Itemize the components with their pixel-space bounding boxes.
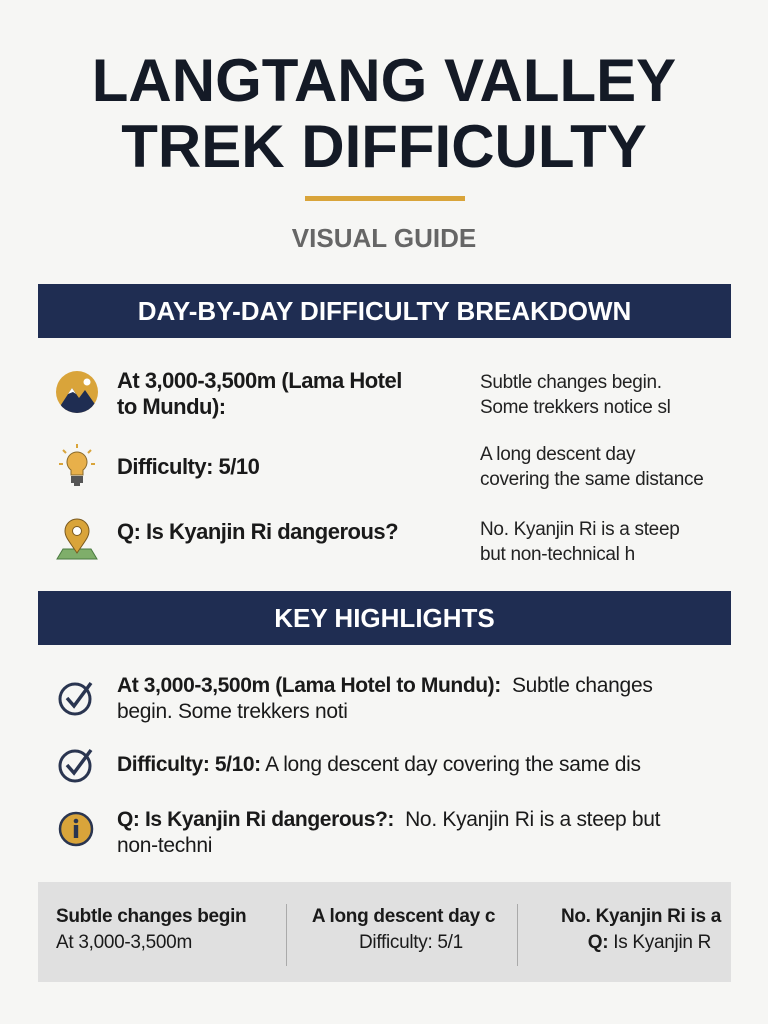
row 3 xyxy=(56,518,680,565)
title xyxy=(92,47,676,180)
highlight 1: begin. Some trekkers noti xyxy=(117,700,348,723)
banner: key highlights xyxy=(38,591,731,645)
icon: check xyxy=(58,749,92,782)
row 1 xyxy=(56,368,671,419)
icon: map pin xyxy=(56,518,98,560)
summary cell 3: No. Kyanjin Ri is a xyxy=(561,906,721,927)
label xyxy=(117,368,402,419)
highlight 2 xyxy=(58,749,641,782)
summary cell 2: A long descent day c xyxy=(312,906,495,927)
description xyxy=(480,519,680,565)
highlight 1 xyxy=(58,674,653,723)
icon: mountain xyxy=(56,371,98,413)
subtitle: VISUAL GUIDE xyxy=(292,223,476,253)
summary cell 3 xyxy=(561,906,722,953)
title: LANGTANG VALLEY xyxy=(92,47,676,114)
row 2 xyxy=(59,444,704,490)
label: At 3,000-3,500m (Lama Hotel xyxy=(117,368,402,393)
summary cell 1: At 3,000-3,500m xyxy=(56,932,192,953)
description xyxy=(480,444,704,490)
highlight 1: At 3,000-3,500m (Lama Hotel to Mundu): Subtle changes xyxy=(117,674,653,697)
highlight 2: Difficulty: 5/10: A long descent day covering the same dis xyxy=(117,753,641,776)
description: Some trekkers notice sl xyxy=(480,397,671,418)
description: Subtle changes begin. xyxy=(480,372,662,393)
label: Difficulty: 5/10 xyxy=(117,454,259,479)
summary cell 2 xyxy=(312,906,495,953)
description: No. Kyanjin Ri is a steep xyxy=(480,519,680,540)
icon: info xyxy=(58,812,94,846)
label: Q: Is Kyanjin Ri dangerous? xyxy=(117,519,398,544)
description: covering the same distance xyxy=(480,469,704,490)
summary cell 3: Q: Is Kyanjin R xyxy=(588,932,711,953)
description: but non-technical h xyxy=(480,544,635,565)
gold underline xyxy=(305,196,465,201)
banner: key highlights: KEY HIGHLIGHTS xyxy=(274,603,495,633)
highlight 3: Q: Is Kyanjin Ri dangerous?: No. Kyanjin Ri is a steep but xyxy=(117,808,660,831)
summary bar xyxy=(38,882,731,982)
icon: check xyxy=(58,682,92,716)
label: to Mundu): xyxy=(117,394,226,419)
highlight 3: non-techni xyxy=(117,834,212,857)
description xyxy=(480,372,671,418)
summary cell 2: Difficulty: 5/1 xyxy=(359,932,463,953)
title: TREK DIFFICULTY xyxy=(121,113,647,180)
highlight 3 xyxy=(58,808,660,857)
banner: day-by-day xyxy=(38,284,731,338)
summary cell 1 xyxy=(56,906,246,953)
icon: lightbulb xyxy=(59,444,95,486)
summary cell 1: Subtle changes begin xyxy=(56,906,246,927)
description: A long descent day xyxy=(480,444,635,465)
banner: day-by-day: DAY-BY-DAY DIFFICULTY BREAKDOWN xyxy=(138,296,631,326)
